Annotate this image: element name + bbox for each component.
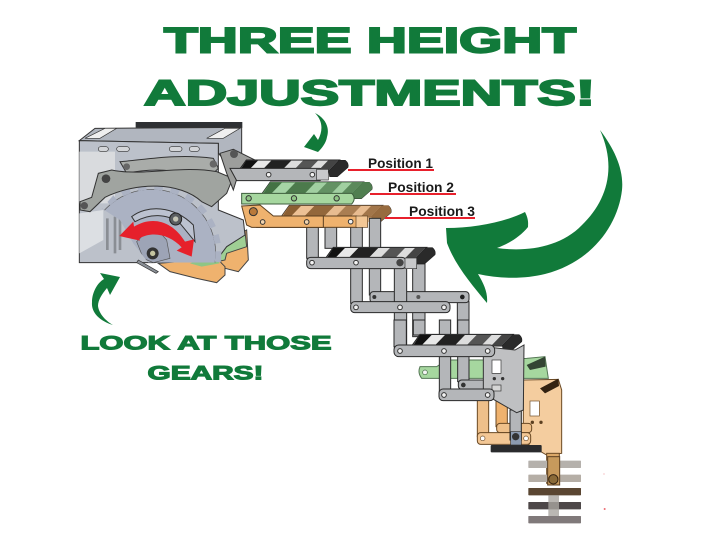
gears caption — [80, 334, 332, 384]
label: position 1: Position 1 — [368, 155, 433, 171]
orange and green flaps — [158, 230, 248, 283]
gears caption: GEARS! — [148, 364, 264, 384]
tread: step 3 — [412, 334, 522, 351]
gears caption: LOOK AT THOSE — [80, 334, 332, 354]
foot bars stacked — [528, 457, 581, 523]
position labels — [348, 155, 475, 219]
top link bar — [394, 345, 495, 357]
black foot bar — [491, 445, 542, 452]
label: position 3: Position 3 — [409, 203, 475, 219]
gear wheel — [102, 186, 222, 263]
link: position 2 — [242, 193, 354, 204]
tread: step 2 — [325, 247, 435, 264]
scissor lift links — [307, 218, 469, 350]
orange bracket — [477, 379, 562, 483]
tread: position 3 — [281, 205, 391, 222]
link: position 3 left pivot — [242, 205, 323, 227]
link: position 1 — [230, 168, 328, 181]
link: position 3 — [257, 216, 368, 227]
title: THREE HEIGHT — [164, 21, 576, 61]
stray red specks — [603, 473, 606, 510]
label: position 2: Position 2 — [388, 179, 454, 195]
tread: position 1 — [238, 160, 348, 177]
title — [144, 21, 595, 113]
top bar — [136, 122, 242, 128]
arrow: small bottom-left green — [92, 273, 120, 325]
grey links and bracket — [394, 320, 524, 445]
red rotation arrow — [119, 221, 194, 257]
arrow: large curved green — [446, 130, 622, 303]
machine housing and gear assembly — [78, 122, 255, 284]
lower end assembly — [394, 320, 606, 523]
title: ADJUSTMENTS! — [144, 73, 595, 113]
green bracket — [419, 357, 548, 378]
lever tab — [137, 260, 158, 273]
arrow: small top green — [304, 113, 328, 152]
tread: position 2 — [262, 182, 372, 199]
upper arms — [80, 149, 255, 212]
housing body — [79, 127, 245, 263]
